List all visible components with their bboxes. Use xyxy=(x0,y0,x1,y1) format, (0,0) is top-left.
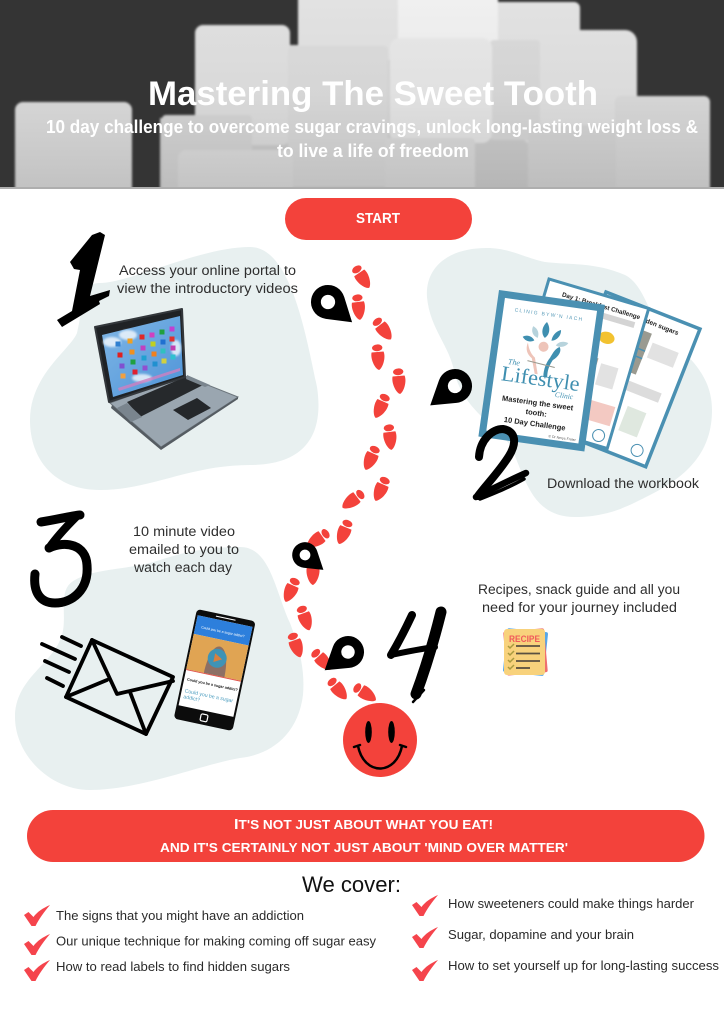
step 4 text xyxy=(478,582,680,615)
workbook cover xyxy=(478,290,605,451)
workbook page 3: hidden sugars xyxy=(552,292,700,467)
subtitle: to live a life of freedom xyxy=(277,140,469,161)
workbook page 2: breakfast challenge: Day 1: Breakfast Challenge xyxy=(561,291,641,321)
banner: not just about what you eat: AND IT'S CERTAINLY NOT JUST ABOUT 'MIND OVER MATTER' xyxy=(160,841,568,855)
laptop base xyxy=(110,376,238,447)
start button: START xyxy=(356,211,400,227)
numeral 3 xyxy=(35,515,87,603)
step 3 text: watch each day xyxy=(133,560,232,575)
phone illustration: Could you be a sugar xyxy=(184,688,234,704)
cover heading: Mastering the sweet xyxy=(502,394,574,412)
cover heading: 10 Day Challenge xyxy=(503,415,566,433)
phone illustration xyxy=(174,609,256,731)
laptop trackpad xyxy=(173,398,211,420)
numeral 4 xyxy=(391,612,441,702)
blob: step 3 background xyxy=(15,547,303,790)
icon: recipe card xyxy=(503,628,548,676)
step 2 text: Download the workbook xyxy=(547,476,699,491)
laptop illustration xyxy=(95,309,238,450)
laptop app icons xyxy=(116,326,180,391)
step 1 text: view the introductory videos xyxy=(117,281,298,296)
cover clinic name: CLINIG BYW'N IACH xyxy=(514,307,584,323)
right item 2: Sugar, dopamine and your brain xyxy=(448,927,634,942)
icon: smiley face xyxy=(343,703,417,777)
header photo: sugar cubes xyxy=(0,0,724,197)
icon: map pin 3 xyxy=(287,537,331,580)
step 4 text: Recipes, snack guide and all you xyxy=(478,582,680,597)
red footprint trail xyxy=(280,263,407,706)
step 3 text: emailed to you to xyxy=(129,542,239,557)
step 3 text xyxy=(129,524,239,575)
step 3 text: 10 minute video xyxy=(133,524,235,539)
step 1 text xyxy=(117,263,298,296)
icon: envelope with speed lines xyxy=(42,637,173,734)
laptop screen frame xyxy=(95,309,185,402)
start button xyxy=(285,198,472,240)
icon: recipe card: RECIPE xyxy=(509,634,540,645)
numeral 2 xyxy=(476,429,526,499)
blob: step 1 background xyxy=(30,247,318,490)
list: right column xyxy=(412,895,719,981)
right item 3 xyxy=(412,958,719,981)
right item 1: How sweeteners could make things harder xyxy=(448,896,695,911)
phone illustration: addict? xyxy=(183,694,200,704)
cover brand name: Lifestyle xyxy=(500,361,581,396)
workbook cover: © Dr Nerys Frater xyxy=(548,434,577,442)
subtitle xyxy=(46,116,698,161)
list: left column xyxy=(24,905,376,981)
phone screen xyxy=(179,615,252,717)
left item 3: How to read labels to find hidden sugars xyxy=(56,959,290,974)
right item 3: How to set yourself up for long-lasting success xyxy=(448,958,719,973)
icon: map pin 4 xyxy=(315,630,370,683)
banner: not just about what you eat: IT'S NOT JUST ABOUT WHAT YOU EAT! xyxy=(234,816,493,833)
phone captions: Could you be a sugar addict? xyxy=(187,678,239,692)
left item 2 xyxy=(24,934,376,955)
step 4 text: need for your journey included xyxy=(482,600,677,615)
left item 3 xyxy=(24,959,290,981)
left item 1 xyxy=(24,905,304,926)
icon: map pin 2 xyxy=(420,362,479,419)
laptop display xyxy=(102,316,183,397)
cover heading: tooth: xyxy=(525,407,547,419)
cover brand name: Clinic xyxy=(554,390,574,401)
workbook illustration xyxy=(478,279,700,467)
step 1 text: Access your online portal to xyxy=(119,263,296,278)
phone video thumbnail xyxy=(186,634,249,681)
banner: not just about what you eat xyxy=(27,810,704,862)
left item 1: The signs that you might have an addiction xyxy=(56,908,304,923)
workbook page 2: breakfast challenge xyxy=(508,279,649,449)
cover heading xyxy=(499,394,574,433)
cover brand name: The xyxy=(508,357,521,368)
heading: we cover: We cover: xyxy=(302,872,401,897)
workbook page 3: hidden sugars: hidden sugars xyxy=(635,314,680,337)
title: Mastering The Sweet Tooth xyxy=(148,75,598,113)
icon: map pin 1 xyxy=(304,278,363,335)
blob: step 2 background xyxy=(427,248,712,517)
right item 2 xyxy=(412,927,634,948)
left item 2: Our unique technique for making coming off sugar easy xyxy=(56,934,376,948)
cover logo xyxy=(518,319,571,380)
laptop keyboard xyxy=(127,377,203,417)
numeral 1 xyxy=(57,232,110,327)
phone illustration: Could you be a sugar addict? xyxy=(201,625,245,638)
right item 1 xyxy=(412,895,695,916)
